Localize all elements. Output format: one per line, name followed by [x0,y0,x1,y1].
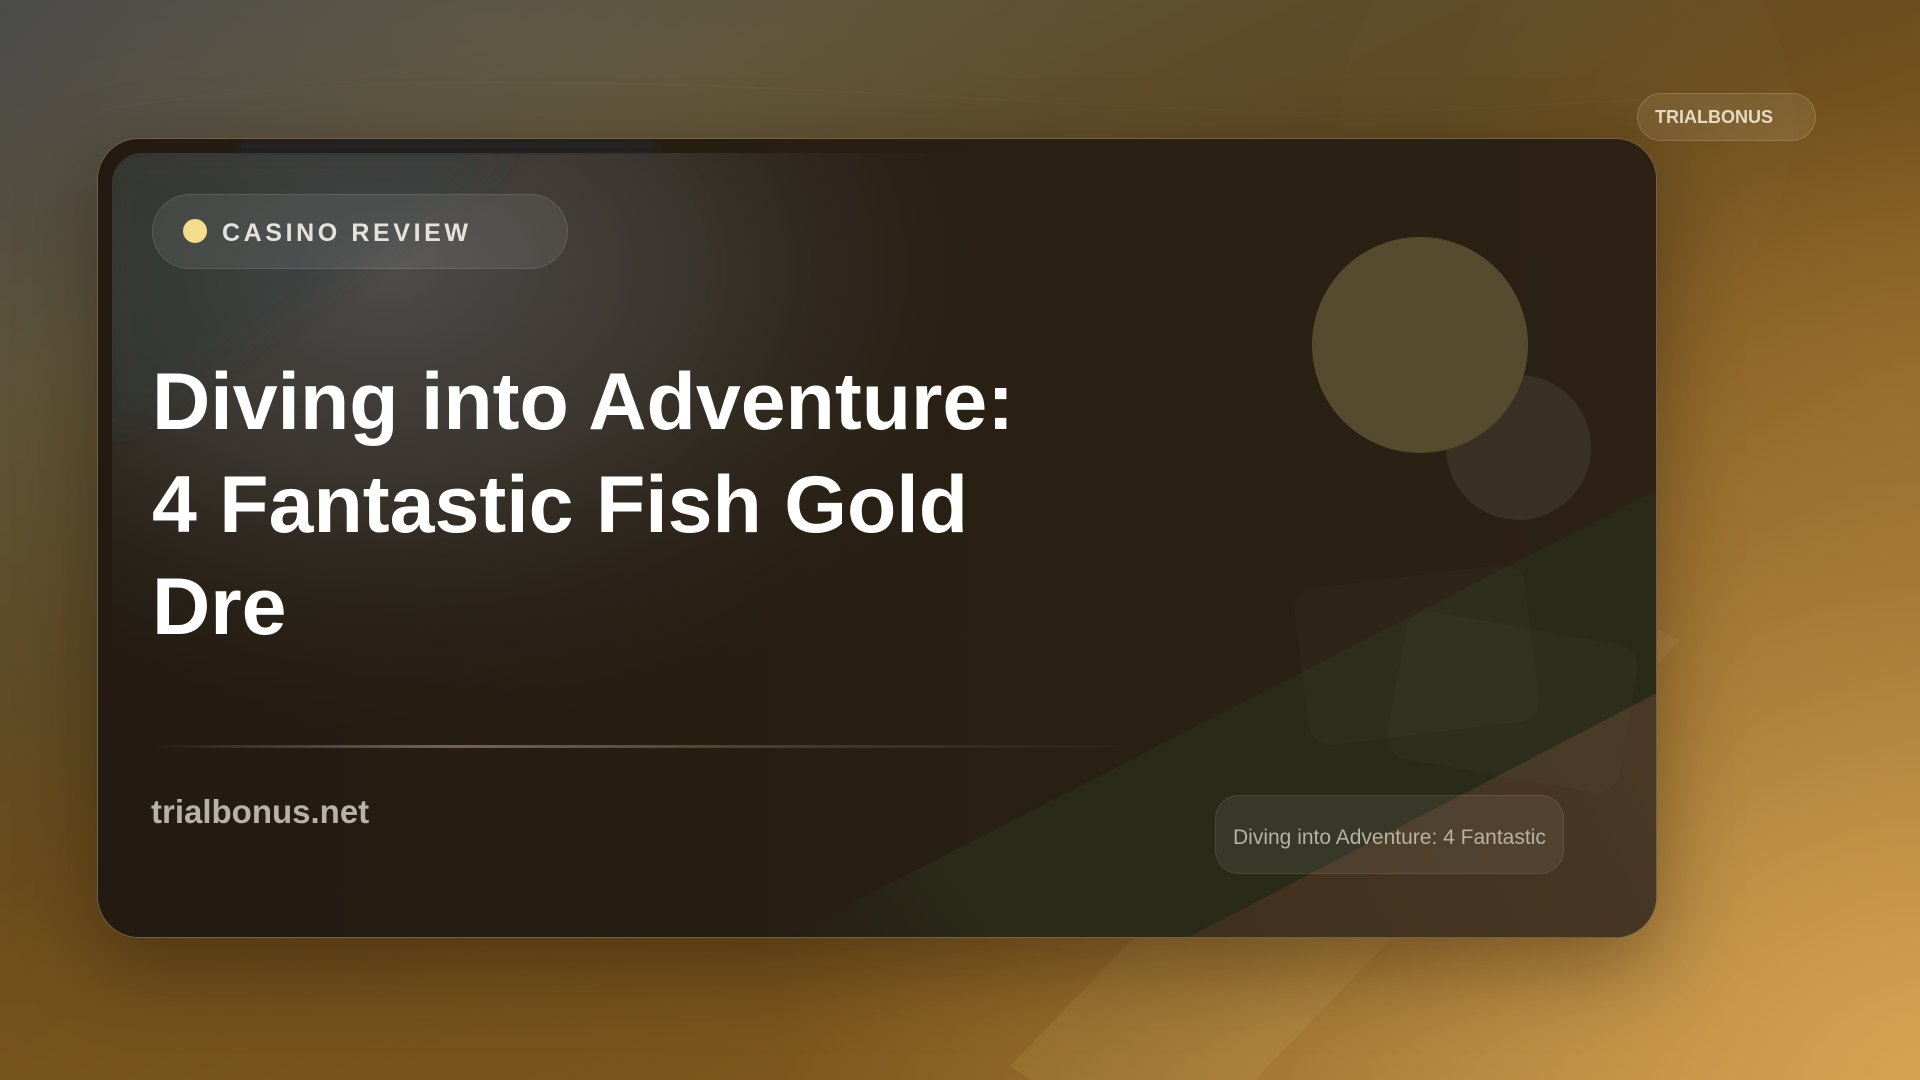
decorative large circle [1312,237,1528,453]
brand tag: TRIALBONUS [1637,93,1816,141]
title: Diving into Adventure: [152,357,1014,447]
decorative rounded square 2 [1384,608,1641,796]
site url: trialbonus.net [151,793,369,830]
badge dot [183,219,207,243]
title: Dre [152,562,287,652]
card top strip blue tint [236,138,656,152]
caption box: Diving into Adventure: 4 Fantastic [1233,826,1546,849]
decorative small circle [1446,375,1591,520]
card top-left blue tint [208,161,470,330]
card base [96,138,1656,938]
divider [150,745,1150,748]
brand tag: TRIALBONUS: TRIALBONUS [1655,107,1773,127]
card top-left inner glow [112,152,1656,952]
decorative rounded square 1 [1292,562,1542,748]
badge: casino review [152,194,568,269]
background faint circle [1340,0,1794,349]
background diagonal light band [1010,560,1680,1080]
caption box [1215,795,1564,874]
card warm corner [1186,692,1656,938]
title: 4 Fantastic Fish Gold [152,460,968,550]
title [152,357,1014,652]
card green band [784,490,1656,938]
background faint curve [100,82,1640,113]
panel: main card [97,138,1657,938]
badge label: CASINO REVIEW [222,219,472,247]
